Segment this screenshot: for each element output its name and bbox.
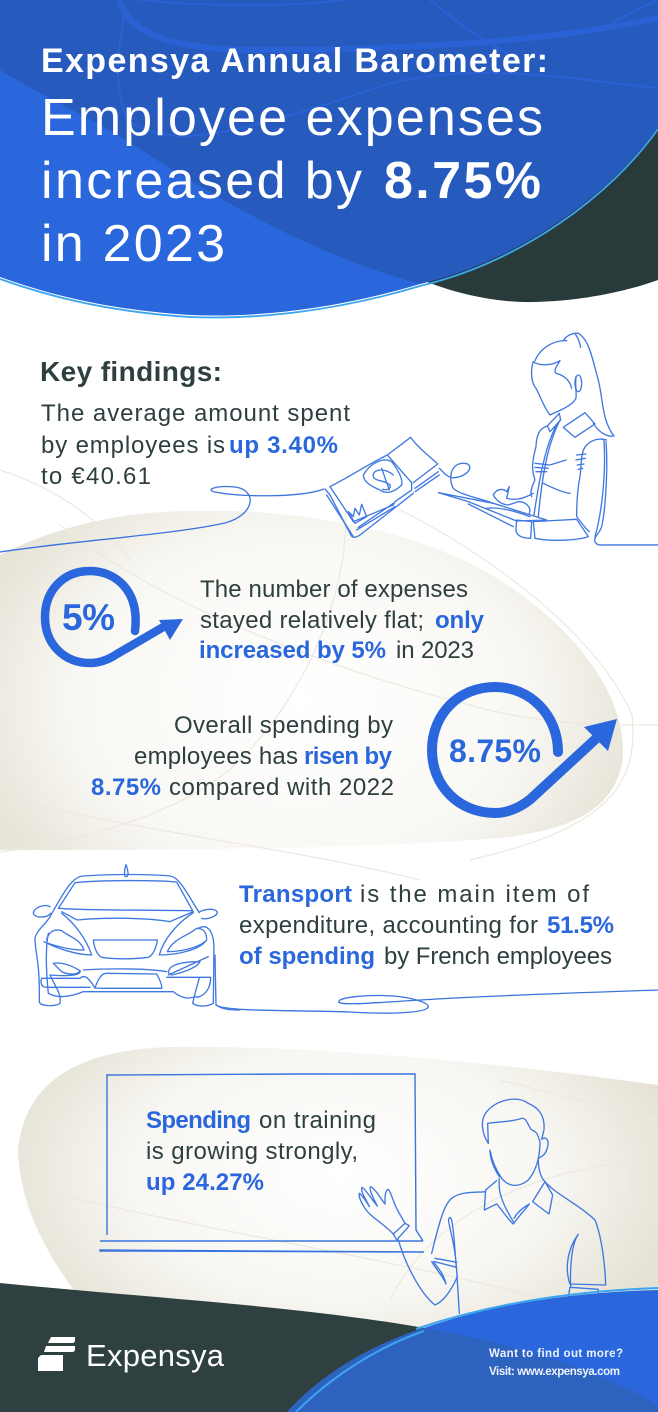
icon: woman with expense book [325, 333, 658, 545]
text block: training: Spending [146, 1107, 251, 1134]
text block: number of expenses: increased by 5% [199, 637, 386, 664]
logo: Expensya: Expensya [86, 1338, 225, 1373]
text block: transport: by French employees [384, 943, 612, 970]
text block: number of expenses: stayed relatively flat; [200, 607, 424, 634]
text block: overall spending [91, 712, 394, 801]
title: Employee expenses [41, 89, 543, 147]
text block: average amount: by employees is [41, 432, 225, 459]
text block: number of expenses: in 2023 [396, 637, 474, 664]
text block: training [146, 1107, 376, 1196]
title: 8.75% [384, 152, 541, 210]
header background [0, 0, 658, 318]
icon: blackboard [100, 1074, 424, 1252]
text block: average amount: The average amount spent [41, 400, 350, 427]
text block: overall spending: compared with 2022 [169, 774, 394, 801]
icon: car [33, 865, 240, 1010]
icon: 8.75% arrow: 8.75% [449, 733, 541, 769]
title: increased by [41, 152, 362, 210]
text block: transport: Transport [239, 881, 352, 908]
heading: key findings: Key findings: [40, 356, 222, 387]
text block: overall spending: employees has [134, 743, 298, 770]
footer call to action: Want to find out more? [489, 1348, 623, 1360]
icon: man presenting [359, 1099, 606, 1313]
text block: average amount [41, 400, 350, 490]
icon: 5% arrow [45, 571, 183, 663]
text block: overall spending: Overall spending by [174, 712, 393, 739]
line: ribbon from car [216, 990, 658, 1013]
text block: training: up 24.27% [146, 1169, 264, 1196]
text block: overall spending: 8.75% [91, 774, 161, 801]
text block: training: is growing strongly, [146, 1138, 358, 1165]
text block: training: on training [259, 1107, 376, 1134]
text block: average amount: to €40.61 [41, 463, 151, 490]
title: in 2023 [41, 215, 225, 273]
icon: 8.75% arrow [432, 687, 617, 813]
footer call to action [489, 1348, 623, 1378]
icon: 5% arrow: 5% [62, 597, 115, 638]
line: ribbon to book [0, 487, 324, 552]
text block: number of expenses [199, 576, 485, 664]
panel: beige blob training [18, 1047, 658, 1345]
text block: transport: is the main item of [360, 881, 589, 908]
text block: number of expenses: only [435, 607, 485, 634]
text block: transport [239, 881, 614, 970]
text block: overall spending: risen by [304, 743, 393, 770]
text block: number of expenses: The number of expenses [200, 576, 468, 603]
title [41, 42, 548, 273]
text block: average amount: up 3.40% [229, 432, 338, 459]
text block: transport: 51.5% [547, 912, 614, 939]
panel: beige blob spending [0, 470, 658, 880]
footer background [0, 1283, 658, 1412]
text block: transport: expenditure, accounting for [239, 912, 538, 939]
footer call to action: Visit: www.expensya.com [489, 1366, 620, 1378]
text block: transport: of spending [239, 943, 375, 970]
title: Expensya Annual Barometer: [41, 42, 548, 80]
